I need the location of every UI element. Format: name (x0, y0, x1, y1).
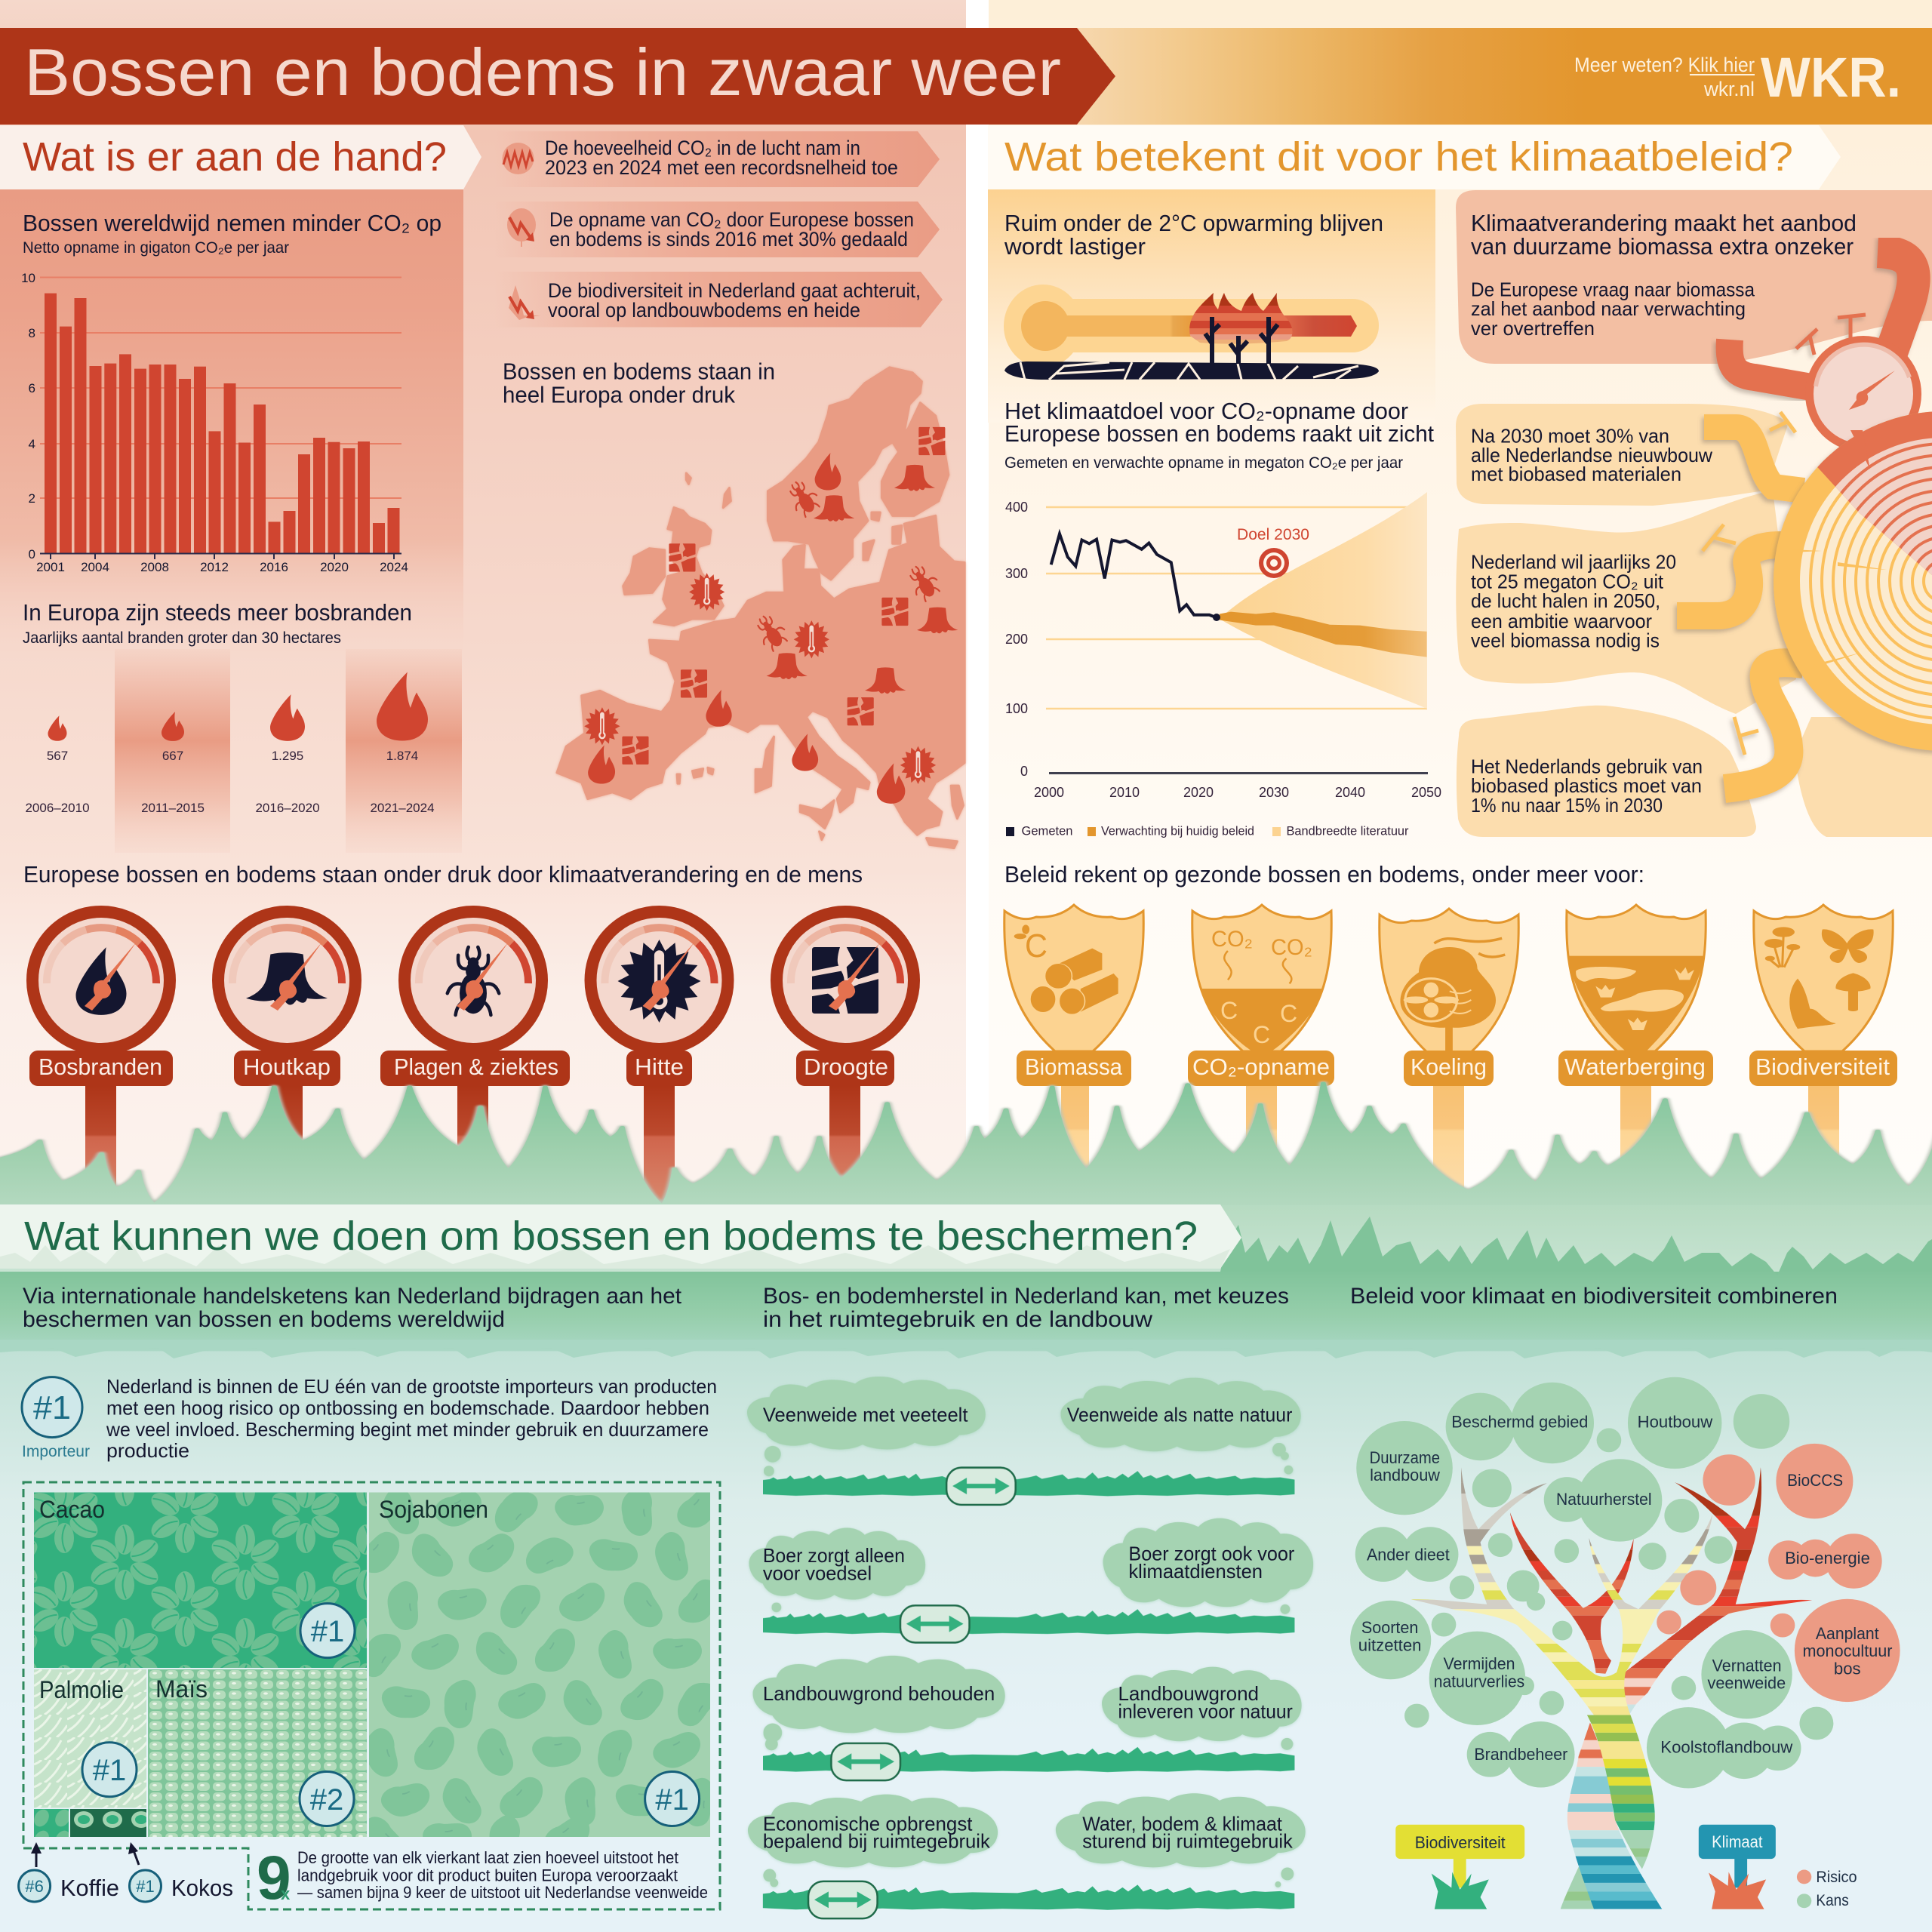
pipes: red (1730, 251, 1914, 387)
bubble labels: veenweide (1708, 1674, 1786, 1693)
callout arrow: biodiversity: De biodiversiteit in Nederland gaat achteruit, (548, 279, 921, 302)
bar chart: CO2 uptake forests: 10 (21, 271, 35, 285)
text block: map heading: heel Europa onder druk (503, 382, 735, 408)
text panel: CO2 removal: Nederland wil jaarlijks 20 (1471, 551, 1676, 574)
callout: 9x emissions (257, 1844, 708, 1912)
bar chart: CO2 uptake forests: 2 (29, 491, 35, 506)
bar chart: CO2 uptake forests: 0 (29, 547, 35, 561)
bubble labels: Duurzame (1370, 1448, 1440, 1467)
text block: importer paragraph (106, 1375, 717, 1462)
legend: koffie and kokos: #1 (136, 1877, 155, 1896)
row: ruimtegebruik: Economische opbrengst (763, 1814, 972, 1835)
bubbles: risks (1657, 1444, 1900, 1702)
shield: Biodiversiteit (1749, 905, 1897, 1086)
line chart: CO2 uptake target: 300 (1005, 566, 1028, 581)
chart: forest fires per period: 2011–2015 (141, 801, 205, 815)
sign: Klimaat: Klimaat (1712, 1832, 1763, 1851)
block heading: trade chains: Via internationale handelsketens kan Nederland bijdragen aan het (23, 1284, 682, 1309)
callout: 9x emissions: 9 (257, 1844, 291, 1912)
legend: climate chart: Verwachting bij huidig beleid (1101, 824, 1254, 838)
text panel: biobased building (1456, 404, 1789, 506)
chart: forest fires per period: Jaarlijks aantal branden groter dan 30 hectares (23, 629, 341, 647)
text block: climate target: Gemeten en verwachte opname in megaton CO₂e per jaar (1004, 454, 1403, 472)
shield: Biodiversiteit: Biodiversiteit (1755, 1054, 1890, 1080)
shield: Biomassa: C (1025, 928, 1048, 964)
shield: Waterberging (1558, 905, 1713, 1086)
callout arrow: CO2 in the air: 2023 en 2024 met een recordsnelheid toe (545, 156, 898, 179)
gauge: Hitte: Hitte (635, 1054, 684, 1080)
row: ruimtegebruik: sturend bij ruimtegebruik (1082, 1832, 1293, 1853)
tree: lower left strand (1561, 1867, 1595, 1909)
icon: thermometer with burning forest (1004, 285, 1379, 380)
callout: 9x emissions: x (281, 1884, 291, 1903)
badge: importer rank: #1 (33, 1389, 71, 1426)
text block: 2 degrees: wordt lastiger (1004, 233, 1146, 260)
gauge: Houtkap: Houtkap (243, 1054, 331, 1080)
row: veenweide (747, 1377, 1301, 1505)
text block: importer paragraph: we veel invloed. Bescherming begint met minder gebruik en duurzamere (106, 1418, 709, 1441)
legend: koffie and kokos: #6 (25, 1877, 44, 1896)
legend: risico and kans: Risico (1816, 1869, 1857, 1886)
illustration: tree ring with pipes and gauge (1677, 251, 1932, 789)
text panel: CO2 removal: tot 25 megaton CO₂ uit (1471, 571, 1664, 593)
row: landbouwgrond: Landbouwgrond behouden (763, 1684, 995, 1705)
heading: wat kunnen we doen: Wat kunnen we doen om bossen en bodems te beschermen? (24, 1214, 1198, 1259)
bar chart: CO2 uptake forests (21, 210, 441, 574)
line chart: CO2 uptake target: 2010 (1109, 785, 1140, 800)
treemap: import products: #2 (310, 1783, 343, 1817)
gauge: Plagen en ziektes: Plagen & ziektes (394, 1054, 558, 1080)
text block: importer paragraph: met een hoog risico op ontbossing en bodemschade. Daardoor hebben (106, 1396, 709, 1419)
legend: risico and kans (1797, 1869, 1857, 1909)
shield: Waterberging: Waterberging (1564, 1054, 1706, 1080)
chart: forest fires per period: In Europa zijn steeds meer bosbranden (23, 599, 412, 626)
row: ruimtegebruik: Water, bodem & klimaat (1082, 1814, 1282, 1835)
bubble labels: Bio-energie (1785, 1549, 1870, 1567)
text panel: CO2 removal: veel biomassa nodig is (1471, 629, 1660, 652)
bubbles: opportunities (1350, 1377, 1833, 1789)
chart: forest fires per period: 1.874 (386, 749, 418, 763)
bar chart: CO2 uptake forests: 2012 (200, 560, 229, 574)
gauge: Bosbranden: Bosbranden (38, 1054, 162, 1080)
treemap: import products: Maïs (155, 1675, 208, 1703)
callout arrow: European uptake (494, 202, 940, 257)
treemap: import products: #1 (311, 1615, 344, 1648)
row: ruimtegebruik (748, 1793, 1306, 1918)
tree: trunk strand green (1587, 1715, 1655, 1869)
bubble labels: Soorten (1361, 1618, 1418, 1637)
block heading: trade chains: beschermen van bossen en bodems wereldwijd (23, 1307, 505, 1332)
header band right: wkr.nl (1703, 78, 1755, 100)
text panel: biobased plastics (1457, 706, 1932, 837)
bubble labels: Vermijden (1444, 1654, 1515, 1673)
chart: forest fires per period: 2016–2020 (255, 801, 320, 815)
bubble labels: Beschermd gebied (1451, 1413, 1588, 1431)
bar chart: CO2 uptake forests: 2004 (81, 560, 109, 574)
bar chart: CO2 uptake forests: 2016 (260, 560, 288, 574)
text block: importer paragraph: productie (106, 1439, 189, 1462)
bubble labels: Vernatten (1712, 1657, 1782, 1675)
text panel: biomass supply: Klimaatverandering maakt het aanbod (1471, 210, 1857, 236)
tree: trunk strand blue (1567, 1722, 1662, 1909)
shield: Biomassa: Biomassa (1025, 1054, 1123, 1080)
chart: forest fires per period: 567 (47, 749, 68, 763)
chart: forest fires per period (23, 599, 462, 853)
text block: climate target: Het klimaatdoel voor CO₂-opname door (1004, 398, 1408, 424)
bar chart: CO2 uptake forests: 6 (29, 381, 35, 395)
line chart: CO2 uptake target: 2000 (1034, 785, 1064, 800)
bubble labels: uitzetten (1358, 1636, 1421, 1654)
line chart: CO2 uptake target: 2050 (1411, 785, 1441, 800)
callout arrow: biodiversity: vooral op landbouwbodems en heide (548, 299, 860, 321)
treemap: import products: Sojabonen (379, 1496, 488, 1523)
text panel: CO2 removal (1456, 491, 1796, 714)
legend: risico and kans: Kans (1816, 1892, 1849, 1909)
callout arrow: European uptake: en bodems is sinds 2016 met 30% gedaald (549, 228, 908, 251)
text block: policy heading: Beleid rekent op gezonde bossen en bodems, onder meer voor: (1004, 861, 1644, 888)
chart: forest fires per period: 2021–2024 (370, 801, 435, 815)
line chart: CO2 uptake target: 0 (1020, 764, 1028, 779)
grass fringe above lower content (0, 1340, 1932, 1358)
legend: climate chart (1006, 824, 1409, 838)
text panel: biomass supply: van duurzame biomassa extra onzeker (1471, 233, 1854, 260)
sign: Biodiversiteit: Biodiversiteit (1415, 1833, 1506, 1852)
background: right section (989, 0, 1932, 1208)
text block: 2 degrees (1004, 210, 1383, 260)
tree: climate and biodiversity (1350, 1377, 1900, 1909)
row: boer: Boer zorgt alleen (763, 1546, 905, 1567)
text panel: biobased plastics: biobased plastics moet van (1471, 774, 1702, 797)
background: left section (0, 0, 966, 1208)
bar chart: CO2 uptake forests: Netto opname in gigaton CO₂e per jaar (23, 239, 289, 257)
treemap: import products: Palmolie (39, 1676, 124, 1703)
shield: Koeling (1380, 909, 1518, 1086)
callout arrow: CO2 in the air (494, 131, 940, 187)
bar chart: CO2 uptake forests: 2001 (36, 560, 65, 574)
line chart: CO2 uptake target: 2020 (1183, 785, 1214, 800)
text panel: biomass supply: De Europese vraag naar biomassa (1471, 278, 1755, 301)
row: boer: klimaatdiensten (1128, 1561, 1263, 1583)
bubble labels: Aanplant (1816, 1624, 1879, 1643)
row: veenweide: Veenweide als natte natuur (1067, 1404, 1293, 1426)
bar chart: CO2 uptake forests: 2020 (320, 560, 349, 574)
line chart: CO2 uptake target: 100 (1005, 701, 1028, 716)
bubble labels: BioCCS (1787, 1471, 1843, 1490)
bar chart: CO2 uptake forests: 2024 (380, 560, 408, 574)
text block: importer paragraph: Nederland is binnen de EU één van de grootste importeurs van producten (106, 1375, 717, 1398)
shield: CO2-opname: C (1253, 1021, 1270, 1048)
line chart: CO2 uptake target: 2040 (1335, 785, 1365, 800)
shield: CO2-opname: CO₂-opname (1192, 1054, 1330, 1080)
callout: 9x emissions: De grootte van elk vierkant laat zien hoeveel uitstoot het (297, 1848, 678, 1867)
row: landbouwgrond: Landbouwgrond (1118, 1684, 1259, 1705)
callout: 9x emissions: — samen bijna 9 keer de uitstoot uit Nederlandse veenweide (297, 1883, 708, 1902)
header band right: WKR. (1761, 46, 1901, 109)
legend: climate chart: Bandbreedte literatuur (1286, 824, 1409, 838)
signs: posts behind forest (85, 1086, 1839, 1218)
badge: importer rank (22, 1377, 90, 1460)
row: boer: Boer zorgt ook voor (1128, 1544, 1295, 1565)
treemap: import products: #1 (93, 1754, 126, 1787)
shield: CO2-opname: CO₂ (1271, 935, 1312, 960)
bar chart: CO2 uptake forests: 4 (29, 437, 35, 451)
text panel: biomass supply: ver overtreffen (1471, 317, 1595, 340)
text panel: CO2 removal: de lucht halen in 2050, (1471, 589, 1660, 612)
text block: map heading (503, 358, 775, 408)
text panel: biomass supply (1456, 190, 1932, 364)
shield: Biomassa (1004, 905, 1143, 1086)
tree: branches yellow (1405, 1467, 1733, 1715)
chart: forest fires per period: 667 (162, 749, 183, 763)
text block: climate target: Europese bossen en bodems raakt uit zicht (1004, 420, 1434, 447)
row: boer: voor voedsel (763, 1563, 872, 1584)
row: ruimtegebruik: bepalend bij ruimtegebruik (763, 1832, 990, 1853)
text block: climate target (1004, 398, 1434, 472)
bubble labels: landbouw (1370, 1466, 1441, 1484)
chart: forest fires per period: 1.295 (272, 749, 303, 763)
gauge: Hitte (590, 912, 728, 1086)
grass strip right of green heading (1220, 1217, 1932, 1275)
panel: charts left (0, 189, 463, 657)
treemap: import products: Cacao (39, 1496, 105, 1523)
line chart: CO2 uptake target (1005, 492, 1441, 800)
row: landbouwgrond: inleveren voor natuur (1118, 1702, 1293, 1723)
bubble labels: bos (1834, 1660, 1861, 1678)
text panel: biobased plastics: Het Nederlands gebruik van (1471, 755, 1703, 777)
bubble labels: Koolstoflandbouw (1660, 1738, 1793, 1756)
bubble labels: Natuurherstel (1556, 1490, 1652, 1509)
legend: climate chart: Gemeten (1022, 824, 1073, 838)
callout arrow: European uptake: De opname van CO₂ door Europese bossen (549, 208, 914, 231)
heading: wat is er aan de hand: Wat is er aan de hand? (23, 134, 447, 180)
header band right (966, 28, 1932, 125)
legend: koffie and kokos: Kokos (171, 1875, 233, 1901)
block heading: restoration (763, 1284, 1289, 1332)
line chart: CO2 uptake target: 400 (1005, 500, 1028, 515)
block heading: restoration: Bos- en bodemherstel in Nederland kan, met keuzes (763, 1284, 1289, 1309)
chart: forest fires per period: 2006–2010 (25, 801, 90, 815)
title: Bossen en bodems in zwaar weer (24, 35, 1061, 109)
shield: CO2-opname (1188, 905, 1334, 1086)
sign: Klimaat (1699, 1825, 1776, 1909)
callout arrow: biodiversity (494, 272, 943, 328)
row: veenweide: Veenweide met veeteelt (763, 1404, 968, 1426)
treemap: import products (23, 1478, 724, 1909)
bar chart: CO2 uptake forests: 8 (29, 326, 35, 340)
heading: wat betekent dit (988, 125, 1841, 189)
gauge: pipeline (1805, 336, 1921, 452)
legend: koffie and kokos (19, 1842, 233, 1902)
header band right: Meer weten? Klik hier (1574, 54, 1755, 76)
bar chart: CO2 uptake forests: 2008 (140, 560, 169, 574)
text block: 2 degrees: Ruim onder de 2°C opwarming blijven (1004, 210, 1383, 236)
text block: map heading: Bossen en bodems staan in (503, 358, 775, 385)
shield: Koeling: Koeling (1411, 1054, 1487, 1080)
line chart: CO2 uptake target: 2030 (1259, 785, 1289, 800)
callout: 9x emissions: landgebruik voor dit product buiten Europa veroorzaakt (297, 1866, 678, 1884)
text panel: biobased building: met biobased materialen (1471, 463, 1681, 485)
forest silhouette (0, 1083, 1932, 1272)
trade-off sliders (747, 1377, 1313, 1918)
block heading: restoration: in het ruimtegebruik en de landbouw (763, 1307, 1152, 1332)
legend: koffie and kokos: Koffie (60, 1875, 119, 1901)
background: bottom section (0, 1269, 1932, 1932)
text panel: biobased plastics: 1% nu naar 15% in 2030 (1471, 794, 1663, 817)
bubble labels: monocultuur (1803, 1641, 1893, 1660)
heading: wat is er aan de hand (0, 125, 481, 189)
pipes: orange (1677, 412, 1804, 789)
tree: branches red (1502, 1467, 1829, 1719)
row: boer (749, 1518, 1313, 1643)
shield: CO2-opname: CO₂ (1211, 927, 1253, 952)
block heading: trade chains (23, 1284, 682, 1332)
gauge: Bosbranden (29, 912, 173, 1086)
gauge: Droogte (777, 912, 914, 1086)
gauge: Plagen en ziektes (380, 912, 570, 1086)
block heading: combine policy: Beleid voor klimaat en biodiversiteit combineren (1350, 1284, 1838, 1309)
text panel: biobased building: Na 2030 moet 30% van (1471, 424, 1669, 447)
shield: CO2-opname: C (1280, 1000, 1297, 1027)
text panel: biobased building: alle Nederlandse nieuwbouw (1471, 444, 1712, 466)
sign: Biodiversiteit (1395, 1825, 1524, 1909)
shield: CO2-opname: C (1220, 997, 1238, 1024)
text panel: CO2 removal: een ambitie waarvoor (1471, 610, 1652, 632)
tree ring: red overlay (1817, 412, 1932, 575)
line chart: CO2 uptake target: Doel 2030 (1237, 526, 1309, 543)
gauge: Houtkap (218, 912, 355, 1086)
bubble labels: Ander dieet (1367, 1546, 1450, 1564)
heading: wat kunnen we doen (0, 1204, 1241, 1269)
bubble labels: Houtbouw (1638, 1413, 1713, 1431)
text block: pressure heading: Europese bossen en bodems staan onder druk door klimaatverandering en de mens (23, 861, 863, 888)
heading: wat betekent dit: Wat betekent dit voor het klimaatbeleid? (1004, 134, 1793, 180)
title (0, 28, 1115, 125)
bar chart: CO2 uptake forests: Bossen wereldwijd nemen minder CO₂ op (23, 210, 441, 236)
bubble labels: natuurverlies (1434, 1672, 1524, 1691)
panel: climate chart column (988, 189, 1435, 423)
bubble labels: Brandbeheer (1474, 1745, 1568, 1764)
tree ring: orange (1774, 411, 1932, 751)
map: Europe with pressure icons (557, 368, 964, 848)
row: landbouwgrond (752, 1656, 1302, 1780)
treemap: import products: #1 (655, 1783, 689, 1817)
text panel: biomass supply: zal het aanbod naar verwachting (1471, 297, 1746, 320)
badge: importer rank: Importeur (22, 1443, 90, 1460)
gauge: Droogte: Droogte (804, 1054, 888, 1080)
callout arrow: CO2 in the air: De hoeveelheid CO₂ in de lucht nam in (545, 137, 860, 159)
line chart: CO2 uptake target: 200 (1005, 632, 1028, 647)
bubble labels (1358, 1413, 1893, 1764)
